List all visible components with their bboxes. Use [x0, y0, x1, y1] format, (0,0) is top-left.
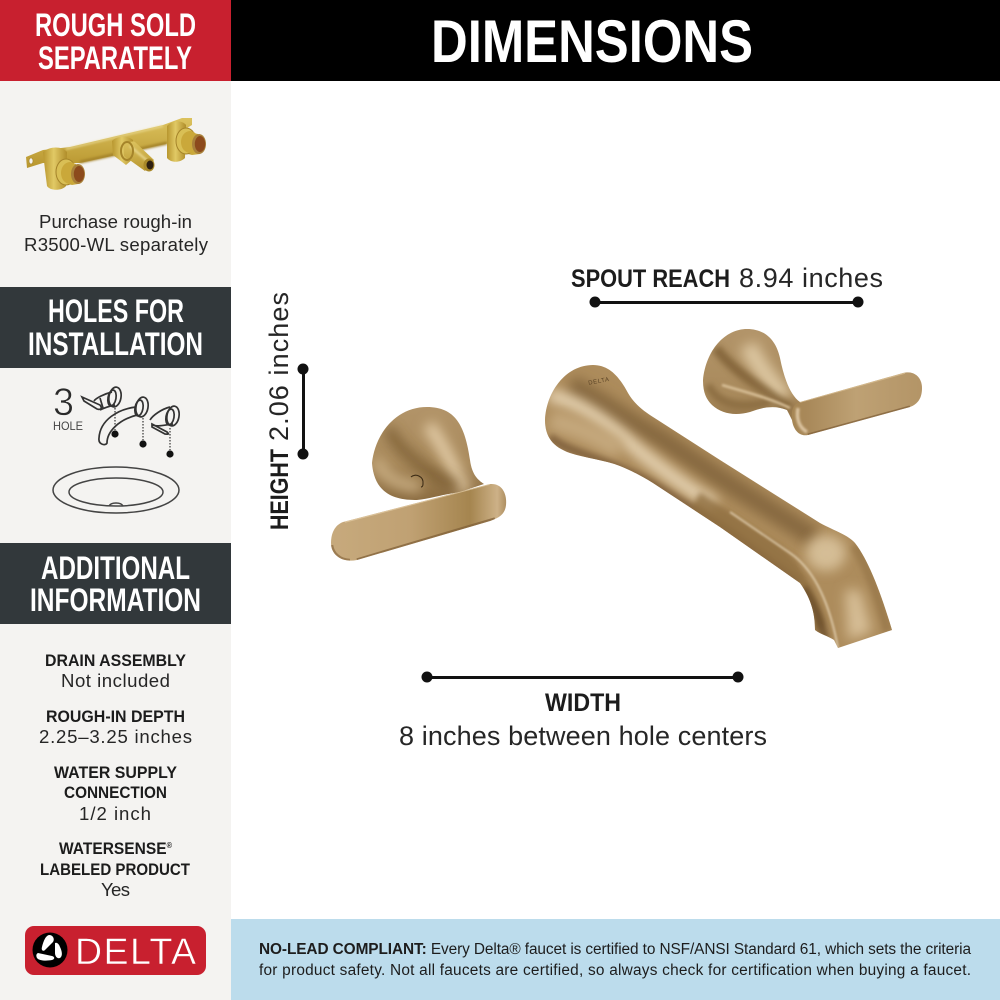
text: drain assembly: DRAIN ASSEMBLY	[45, 651, 187, 670]
panel: sidebar background	[0, 0, 231, 1000]
logo: delta	[25, 926, 206, 975]
callout: no-lead compliant: for product safety. Not all faucets are certified, so always check for certification when buying a faucet.	[259, 962, 971, 979]
banner: rough sold separately	[0, 0, 231, 81]
text: water supply connection	[54, 763, 178, 824]
label: width	[399, 689, 767, 751]
icon: 3 hole faucet and sink diagram: HOLE	[53, 419, 83, 433]
faucet spout	[540, 360, 900, 655]
arrow: height dimension line	[298, 364, 308, 460]
faucet handle: right	[700, 325, 924, 440]
text: drain assembly	[45, 651, 187, 691]
text: water supply connection: WATER SUPPLY	[54, 763, 178, 782]
icon: brass rough-in valve	[26, 118, 206, 190]
label: spout reach: SPOUT REACH	[571, 265, 730, 293]
banner: holes for installation: HOLES FOR	[48, 293, 184, 329]
banner: rough sold separately: SEPARATELY	[38, 40, 192, 76]
title: dimensions	[231, 0, 1000, 81]
text: water supply connection: 1/2 inch	[79, 803, 151, 824]
text: rough-in depth: ROUGH-IN DEPTH	[46, 707, 185, 726]
label: spout reach: 8.94 inches	[739, 263, 883, 293]
callout: no-lead compliant	[231, 919, 1000, 1000]
text: watersense labeled product: ®	[167, 841, 172, 850]
icon: 3 hole faucet and sink diagram	[53, 381, 181, 513]
text: drain assembly: Not included	[61, 670, 170, 691]
banner: additional information: INFORMATION	[30, 582, 201, 618]
label: height	[264, 292, 294, 530]
label: height: HEIGHT	[266, 449, 294, 530]
text: purchase rough-in	[24, 211, 209, 255]
text: water supply connection: CONNECTION	[64, 783, 167, 802]
arrow: width dimension line	[422, 672, 744, 682]
logo: delta: DELTA	[75, 930, 196, 972]
text: purchase rough-in: Purchase rough-in	[39, 211, 192, 232]
text: rough-in depth: 2.25–3.25 inches	[39, 726, 192, 747]
icon: 3 hole faucet and sink diagram: 3	[53, 381, 74, 424]
banner: additional information: ADDITIONAL	[41, 550, 190, 586]
text: purchase rough-in: R3500-WL separately	[24, 234, 209, 255]
text: rough-in depth	[39, 707, 192, 747]
title: dimensions: DIMENSIONS	[431, 8, 753, 75]
callout: no-lead compliant: NO-LEAD COMPLIANT: Every Delta® faucet is certified to NSF/ANSI Standard 61, which sets the criteria	[259, 941, 971, 958]
text: watersense labeled product: LABELED PRODUCT	[40, 860, 191, 879]
label: height: 2.06 inches	[264, 292, 294, 441]
text: watersense labeled product	[40, 839, 191, 900]
label: width: 8 inches between hole centers	[399, 721, 767, 751]
faucet spout: DELTA	[588, 377, 610, 387]
text: watersense labeled product: Yes	[101, 879, 130, 900]
banner: rough sold separately: ROUGH SOLD	[35, 7, 196, 43]
faucet handle: left	[331, 407, 506, 561]
label: width: WIDTH	[545, 689, 621, 717]
banner: holes for installation	[0, 287, 231, 368]
label: spout reach	[571, 263, 883, 293]
banner: additional information	[0, 543, 231, 624]
text: watersense labeled product: WATERSENSE	[59, 839, 177, 858]
arrow: spout reach dimension line	[590, 296, 864, 308]
banner: holes for installation: INSTALLATION	[28, 326, 203, 362]
